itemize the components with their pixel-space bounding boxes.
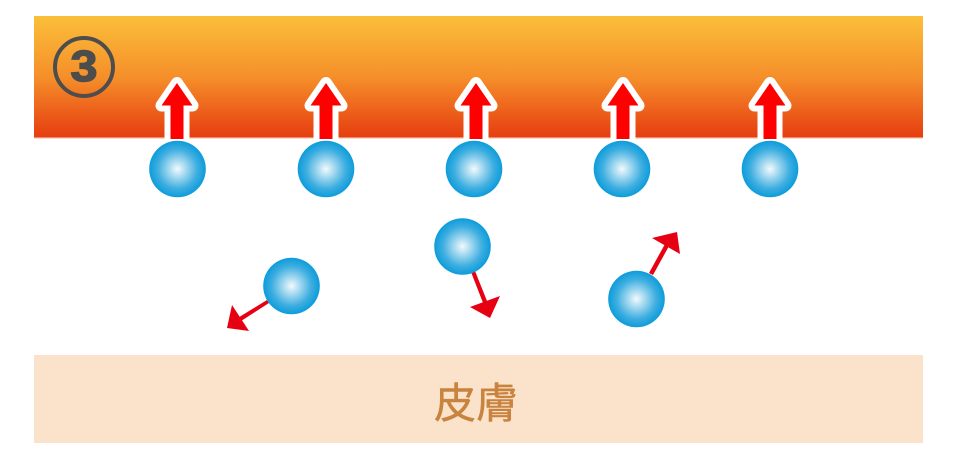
particle: middle <box>434 218 491 275</box>
arrow: lower left <box>227 300 269 331</box>
panel: heat band <box>34 16 923 138</box>
particle: right <box>608 271 665 327</box>
particle: top row 4 <box>594 141 650 197</box>
icon: circled number 3: 3 <box>71 41 97 91</box>
arrow: upward 4 <box>608 83 638 139</box>
icon: circled number 3 <box>55 38 113 96</box>
arrow: upward 2 <box>310 83 342 139</box>
label: skin: 皮膚 <box>434 380 518 427</box>
arrow: upward 3 <box>460 83 492 139</box>
particle: top row 3 <box>446 141 502 197</box>
particle: top row 5 <box>742 141 798 197</box>
arrow: upward 5 <box>754 83 786 139</box>
arrow: upward 1 <box>162 83 192 139</box>
particle: top row 1 <box>149 141 206 197</box>
band lower edge highlight <box>34 138 923 139</box>
particle: lower left <box>263 258 320 314</box>
arrow: down right <box>470 271 500 318</box>
panel: skin <box>34 355 923 443</box>
particle: top row 2 <box>298 141 354 197</box>
arrow: up right <box>649 232 680 275</box>
